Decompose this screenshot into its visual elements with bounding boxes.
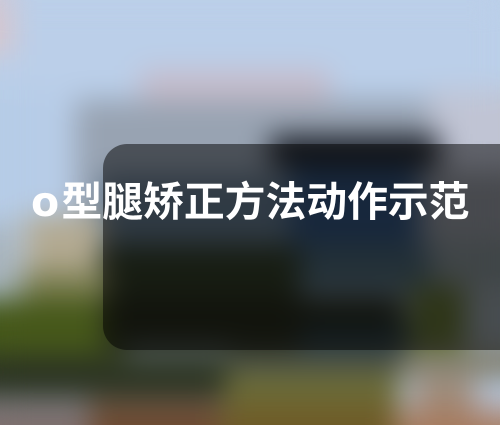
title: o [31,178,59,226]
title: 型腿矫正方法动作示范 [62,179,469,225]
dark rounded panel [103,144,500,350]
